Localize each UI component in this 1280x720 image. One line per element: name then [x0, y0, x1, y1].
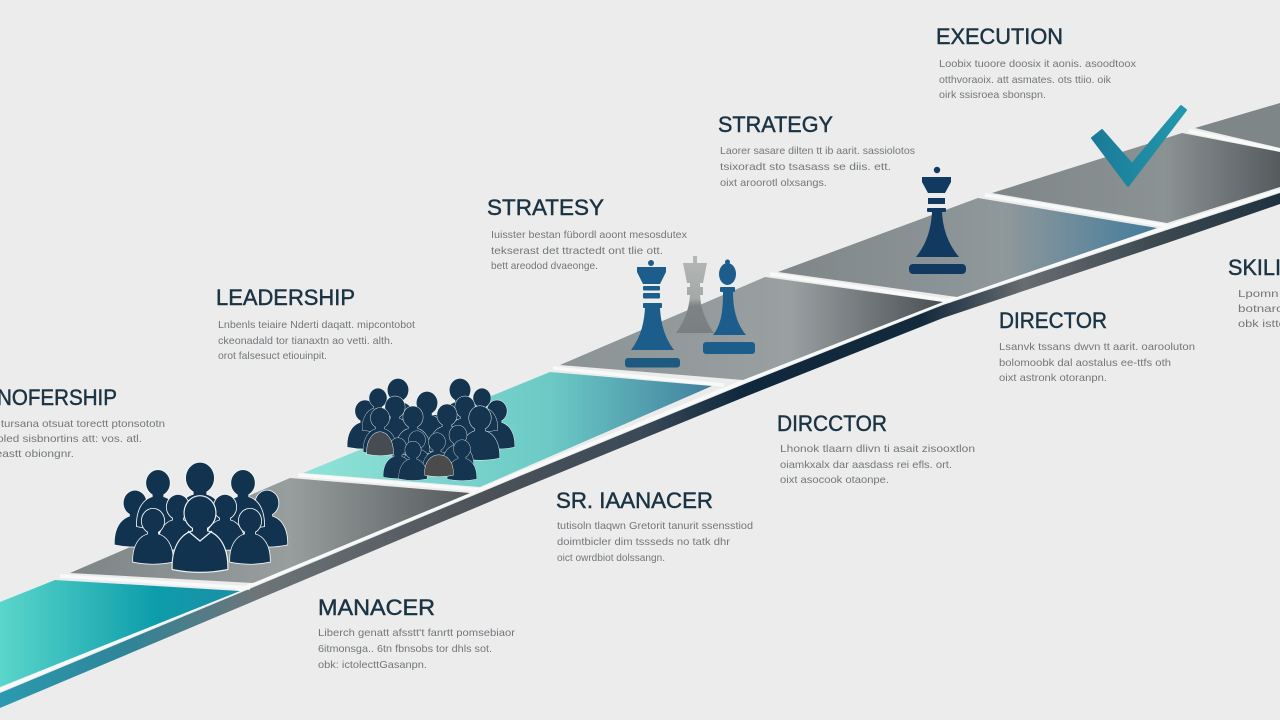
- ribbon white edge line: [0, 190, 1280, 690]
- body: execution: oirk ssisroea sbonspn.: [939, 89, 1046, 101]
- body: strategy lower: tekserast det ttractedt ont tlie ott.: [491, 245, 663, 257]
- icon: team of people: [115, 463, 287, 572]
- body: strategy upper: oixt aroorotl olxsangs.: [720, 177, 827, 189]
- body: manager: [318, 627, 516, 671]
- body: senior manager: tutisoln tlaqwn Gretorit tanurit ssensstiod: [557, 520, 753, 532]
- body: strategy lower: bett areodod dvaeonge.: [491, 260, 598, 272]
- step 4: gray: [560, 277, 943, 380]
- text block: strategy lower: [487, 195, 688, 272]
- body: leadership: Lnbenls teiaire Nderti daqatt. mipcontobot: [218, 319, 415, 331]
- body: execution: [939, 58, 1137, 101]
- body: leadership: [218, 319, 415, 362]
- icon: blue chess rook: [625, 260, 680, 368]
- ribbon base bar: [0, 193, 1280, 708]
- icon: navy chess queen: [909, 167, 966, 274]
- step 7: gray, clipped at right edge: [1195, 103, 1280, 148]
- body: manager: Liberch genatt afsstt't fanrtt pomsebiaor: [318, 627, 516, 639]
- heading: strategy upper: STRATEGY: [718, 112, 833, 137]
- body: leadership: orot falsesuct etiouinpit.: [218, 350, 327, 362]
- heading: execution: EXECUTION: [936, 24, 1063, 49]
- body: skills: [1238, 288, 1280, 330]
- body: director upper: bolomoobk dal aostalus ee-ttfs oth: [999, 357, 1171, 369]
- body: director lower: Lhonok tlaarn dlivn ti asait zisooxtlon: [780, 443, 975, 455]
- text block: strategy upper: [718, 112, 915, 189]
- heading: strategy lower: STRATESY: [487, 195, 604, 220]
- body: strategy lower: Iuisster bestan fübordl aoont mesosdutex: [491, 229, 688, 241]
- step 6: gray: [992, 133, 1280, 223]
- step 3: light teal: [303, 372, 712, 487]
- heading: leadership: LEADERSHIP: [216, 285, 355, 310]
- step 2: gray: [70, 478, 470, 583]
- heading: manager: MANACER: [318, 595, 435, 620]
- heading: senior manager: SR. IAANACER: [556, 488, 713, 513]
- body: leadership: ckeonadald tor tianaxtn ao vetti. alth.: [218, 335, 393, 347]
- step dividers: [60, 131, 1280, 588]
- icon: gray chess piece: [676, 256, 714, 333]
- body: senior manager: doimtbicler dim tssseds no tatk dhr: [557, 536, 731, 548]
- body: manager: obk: ictolecttGasanpn.: [318, 659, 427, 671]
- body: manager: 6itmonsga.. 6tn fbnsobs tor dhls sot.: [318, 643, 492, 655]
- text block: senior manager: [556, 488, 753, 564]
- body: director upper: [999, 341, 1195, 384]
- text block: manager: [318, 595, 516, 671]
- body: strategy upper: [720, 145, 915, 189]
- text block: director lower: [777, 411, 975, 486]
- text block: execution: [936, 24, 1137, 101]
- text block: skills, clipped at right edge: [1228, 255, 1280, 330]
- body: senior manager: [557, 520, 753, 564]
- body: clipped leadership: [0, 418, 165, 460]
- heading: director upper: DIRECTOR: [999, 308, 1107, 333]
- body: director lower: oixt asocook otaonpe.: [780, 474, 889, 486]
- body: execution: otthvoraoix. att asmates. ots ttiio. oik: [939, 74, 1112, 86]
- icon: blue chess bishop: [703, 260, 755, 354]
- icon: teal check mark: [1092, 106, 1186, 186]
- body: director upper: oixt astronk otoranpn.: [999, 372, 1107, 384]
- body: strategy upper: Laorer sasare dilten tt ib aarit. sassiolotos: [720, 145, 915, 157]
- icon: large crowd of people: [347, 379, 515, 480]
- heading: director lower: DIRCCTOR: [777, 411, 887, 436]
- heading: clipped leadership: NOFERSHIP: [0, 385, 117, 410]
- step 1: teal: [0, 580, 240, 687]
- body: director lower: oiamkxalx dar aasdass rei efls. ort.: [780, 459, 952, 471]
- body: strategy upper: tsixoradt sto tsasass se diis. ett.: [720, 161, 891, 173]
- body: director lower: [780, 443, 975, 486]
- text block: clipped leadership at left edge: [0, 385, 165, 460]
- text block: director upper: [999, 308, 1195, 384]
- body: director upper: Lsanvk tssans dwvn tt aarit. oarooluton: [999, 341, 1195, 353]
- body: strategy lower: [491, 229, 688, 272]
- text block: leadership: [216, 285, 415, 362]
- body: senior manager: oict owrdbiot dolssangn.: [557, 552, 665, 564]
- body: execution: Loobix tuoore doosix it aonis. asoodtoox: [939, 58, 1137, 70]
- step 5: gray blue: [778, 198, 1157, 297]
